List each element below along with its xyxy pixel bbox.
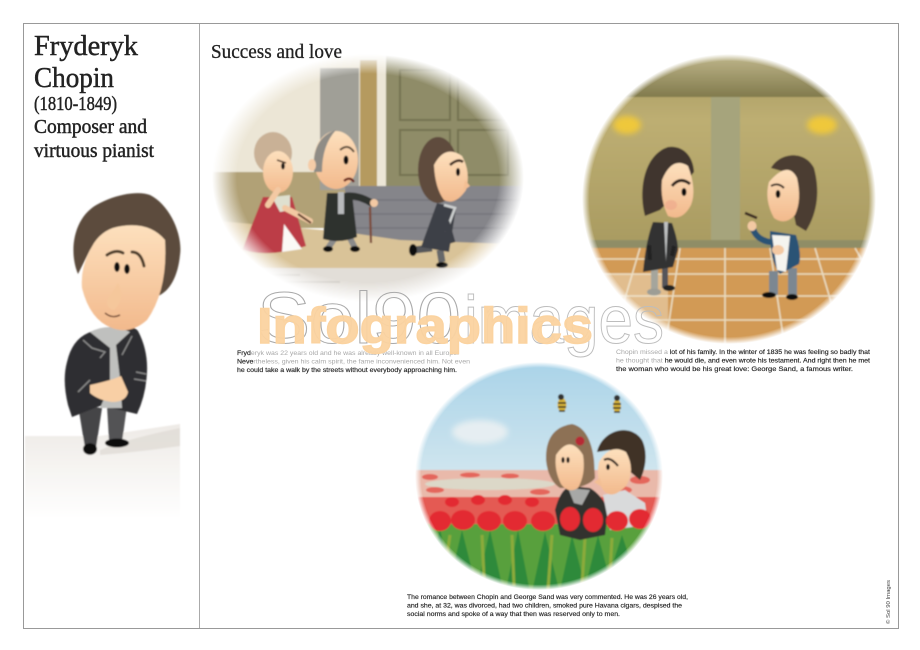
father figure: [308, 130, 378, 252]
subheading: dates: (1810-1849): [34, 93, 117, 115]
wall sconce right: [807, 116, 837, 134]
George Sand figure: [745, 155, 817, 300]
green stems: [428, 523, 650, 590]
caption: the romance: The romance between Chopin and George Sand was very commented. He was 26 years old,: [407, 594, 688, 601]
cobbles: [273, 266, 469, 298]
young Chopin running: [409, 137, 470, 268]
red flower band: [418, 496, 660, 525]
ceiling band: [628, 56, 830, 98]
subheading: role line one: Composer and: [34, 117, 147, 138]
skirting: [575, 240, 885, 248]
illustration: Chopin portrait: [25, 193, 180, 520]
hair: [73, 193, 180, 296]
door panels: [400, 70, 508, 175]
grey column: [320, 68, 359, 190]
wall base: [205, 172, 345, 228]
nose: [107, 283, 121, 310]
bee right: [613, 395, 621, 412]
mother figure: [242, 132, 311, 253]
Chopin figure: [642, 147, 694, 296]
central pillar: [711, 97, 740, 243]
leaf highlights: [446, 535, 612, 590]
heading: name: Fryderyk: [34, 30, 138, 62]
bronze door: [386, 55, 526, 188]
pale field band: [425, 478, 555, 490]
eyebrows: [107, 251, 144, 266]
tile grid: [596, 247, 862, 343]
floor shadow: [25, 424, 180, 520]
heading: surname: Chopin: [34, 62, 114, 94]
palace wall: [218, 57, 386, 186]
steps: [344, 185, 522, 244]
coat trim: [78, 336, 146, 392]
mouth: [105, 313, 120, 317]
shoes: [83, 443, 97, 455]
caption: meeting George Sand: Chopin missed a lot of his family. In the winter of 1835 he was feeling so badly that: [616, 349, 860, 356]
head: [82, 225, 165, 330]
George Sand in field: [546, 424, 608, 540]
watermark: Infographics: Infographics: [257, 298, 593, 354]
Chopin in field: [594, 430, 648, 530]
illustration: tulip field scene: [410, 360, 670, 594]
far flower field: [410, 470, 670, 500]
illustration: meeting George Sand scene: [575, 50, 885, 349]
eyes: [114, 262, 120, 272]
caption: the romance: social norms and spoke of a way that then was reserved only to men.: [407, 611, 620, 618]
caption: fame in Europe: Nevertheless, given his calm spirit, the fame inconvenienced him. Not even: [237, 358, 457, 366]
tiled floor: [592, 248, 866, 344]
watermark: Sol90 images: [257, 279, 664, 359]
hand: [90, 376, 128, 402]
bee left: [558, 394, 566, 412]
panel: sidebar title: [34, 30, 155, 162]
caption: fame in Europe: he could take a walk by the streets without everybody approaching him.: [237, 367, 457, 374]
leaves: [438, 530, 628, 589]
wall sconce left: [613, 116, 641, 134]
coat: [65, 327, 147, 417]
mottled red field: [422, 472, 650, 495]
heading: Success and love: Success and love: [211, 41, 342, 63]
watermark word: Sol90: Sol90: [257, 279, 461, 359]
watermark word: images: images: [464, 282, 664, 358]
platform: [228, 222, 496, 269]
gold wall: [582, 96, 876, 241]
gold pilaster: [360, 60, 377, 186]
illustration: leaving the palace scene: [214, 56, 522, 298]
sidebar divider: [198, 24, 200, 628]
subheading: role line two: virtuous pianist: [34, 141, 155, 162]
caption: the romance: and she, at 32, was divorced, had two children, smoked pure Havana cigars, despised the: [407, 602, 682, 610]
credit: Sol 90 Images: © Sol 90 Images: [885, 580, 892, 624]
clouds: [452, 420, 508, 444]
sky: [410, 360, 670, 472]
cast shadow: [100, 428, 180, 455]
red tulips: [429, 495, 651, 532]
caption: meeting George Sand: the woman who would be his great love: George Sand, a famous writer.: [616, 366, 853, 373]
cravat: [90, 327, 130, 408]
caption: fame in Europe: Fryderyk was 22 years old and he was already well-known in all Europe.: [237, 350, 448, 357]
floor highlight under Chopin: [606, 274, 669, 328]
caption: meeting George Sand: he thought that he would die, and even wrote his testament. And right then he met: [616, 358, 858, 364]
legs: [78, 405, 102, 448]
